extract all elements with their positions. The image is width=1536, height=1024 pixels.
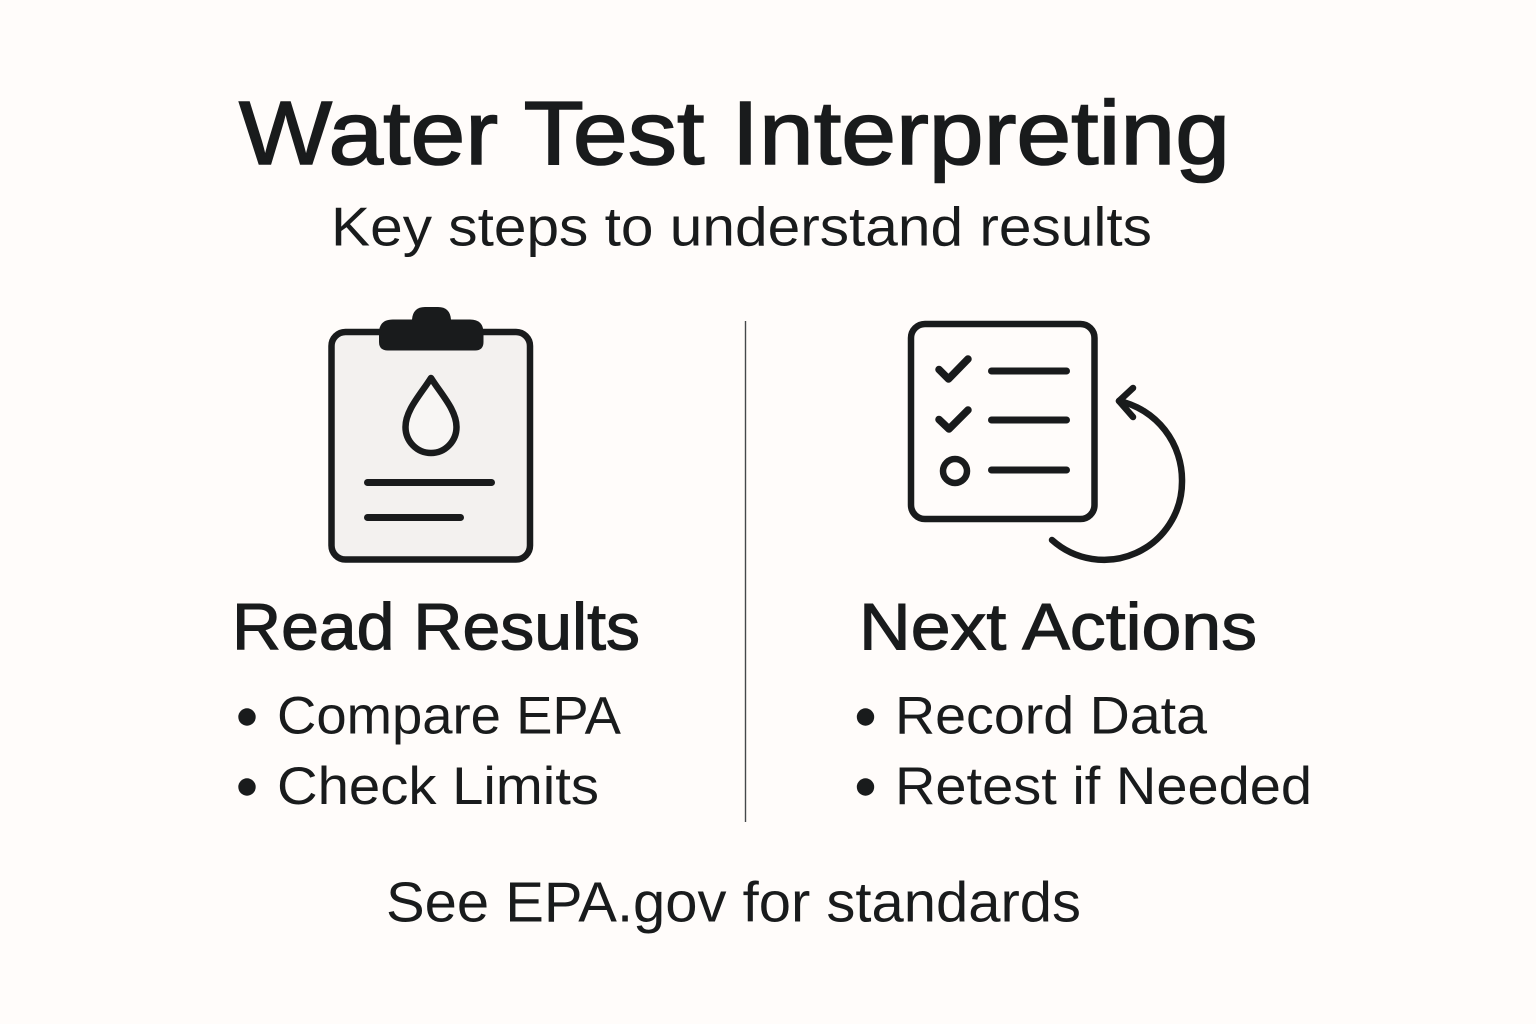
heading: read results: Read Results [232,590,640,664]
panel: next actions [857,590,1312,816]
bullet list: next actions: Record Data [895,686,1208,746]
bullet list: read results: Check Limits [277,757,599,816]
bullet list: read results: Compare EPA [277,686,622,746]
icon: checklist with return arrow [911,324,1182,560]
bullet list: next actions: Retest if Needed [895,757,1312,816]
title: Water Test Interpreting [239,84,1230,184]
divider [744,321,746,822]
bullet list: read results [238,686,622,816]
heading: next actions: Next Actions [859,590,1257,664]
icon: clipboard with water drop [332,307,530,560]
bullet list: next actions [857,686,1312,816]
footer note: See EPA.gov for standards [386,870,1081,934]
panel: read results [232,590,640,816]
subtitle: Key steps to understand results [331,196,1152,258]
